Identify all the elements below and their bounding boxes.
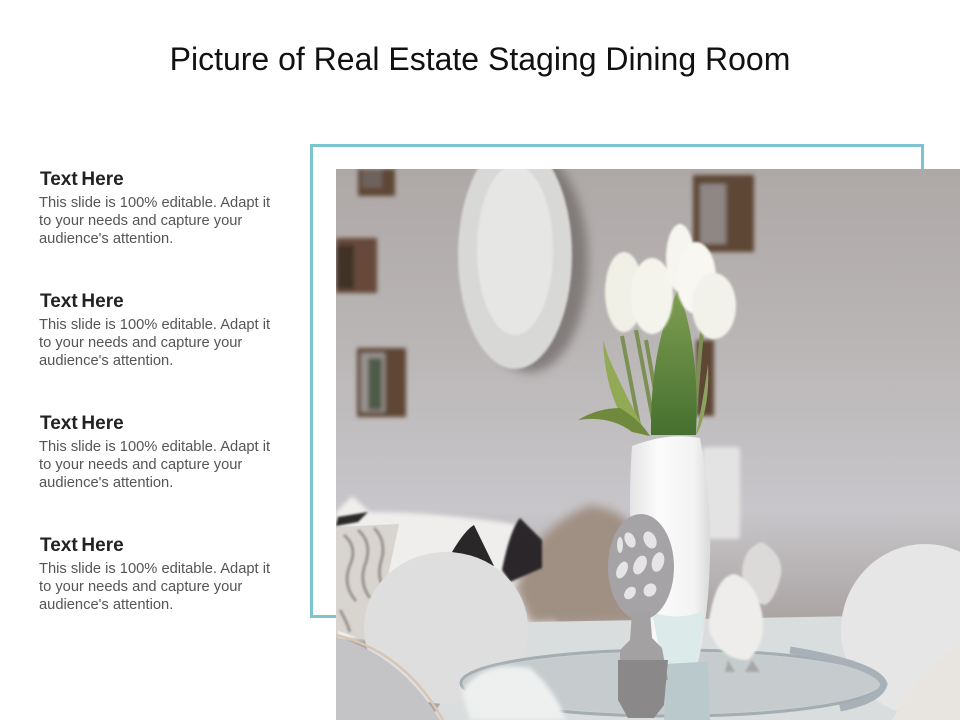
tulips [605, 224, 736, 339]
vase [630, 436, 710, 664]
text block 2: Text Here [40, 291, 124, 312]
text block 1: to your needs and capture your [39, 213, 242, 229]
mirror [458, 141, 588, 372]
text block 3: audience's attention. [39, 475, 173, 491]
text block 2: This slide is 100% editable. Adapt it [39, 317, 270, 333]
ornament: bird [709, 542, 781, 672]
text block 4: This slide is 100% editable. Adapt it [39, 561, 270, 577]
text block 4: audience's attention. [39, 597, 173, 613]
blanket reflection [462, 666, 566, 720]
chair backs [336, 544, 960, 720]
table top [430, 616, 960, 720]
teal frame [310, 144, 924, 618]
vase reflection [664, 662, 710, 720]
text block 2 [39, 291, 270, 369]
leaves [578, 290, 708, 436]
text block 4: to your needs and capture your [39, 579, 242, 595]
photo: dining room with vase of tulips [336, 169, 960, 720]
ornament: lattice cone [608, 514, 674, 718]
text block 1: audience's attention. [39, 231, 173, 247]
text block 3 [39, 413, 270, 491]
text block 2: audience's attention. [39, 353, 173, 369]
lamp shade [702, 447, 740, 539]
text block 2: to your needs and capture your [39, 335, 242, 351]
text block 3: This slide is 100% editable. Adapt it [39, 439, 270, 455]
text block 3: Text Here [40, 413, 124, 434]
text block 4: Text Here [40, 535, 124, 556]
sofa and cushions [336, 496, 640, 640]
text block 3: to your needs and capture your [39, 457, 242, 473]
text block 4 [39, 535, 270, 613]
wall shelves [336, 169, 754, 417]
text block 1: Text Here [40, 169, 124, 190]
wall [336, 169, 960, 720]
text block 1: This slide is 100% editable. Adapt it [39, 195, 270, 211]
glass table ring [461, 650, 884, 716]
text block 1 [39, 169, 270, 247]
title: Picture of Real Estate Staging Dining Room [170, 41, 790, 77]
